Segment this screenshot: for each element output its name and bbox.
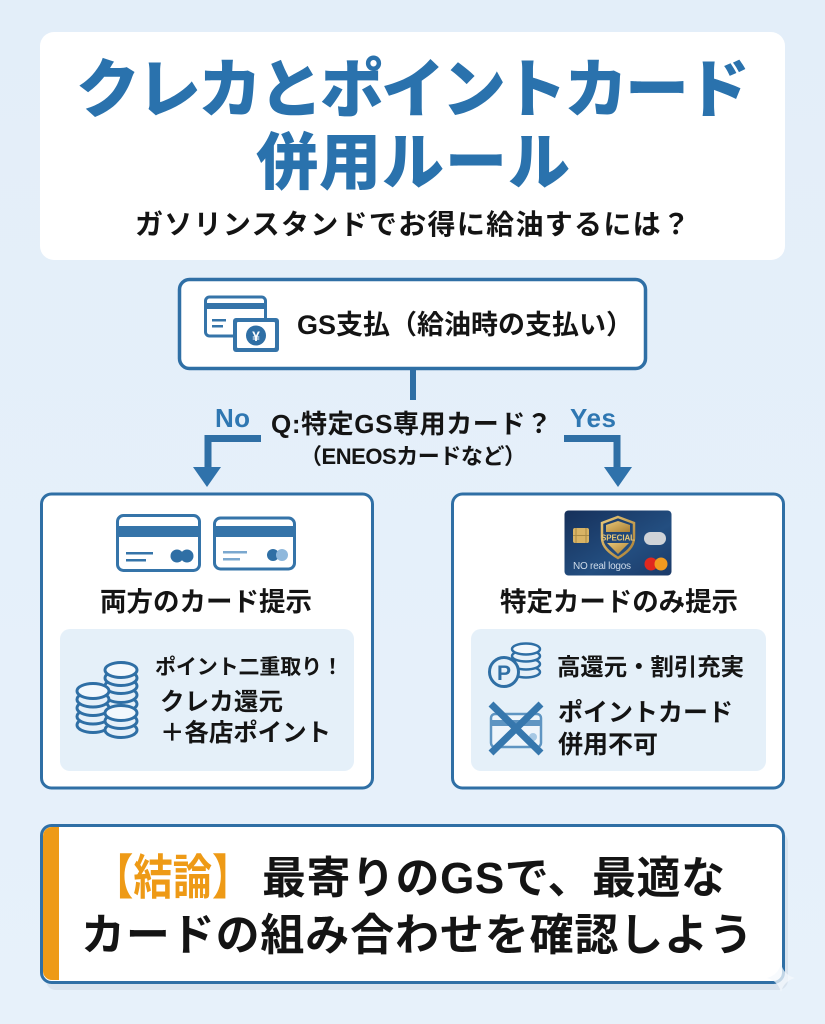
arrow: Yes branch: [564, 403, 632, 487]
question: Q:特定GS専用カード？: [271, 409, 552, 439]
panel: title header: [40, 32, 785, 260]
text: card rebate plus store points: [160, 688, 331, 747]
icon: card and yen banknote: ¥: [252, 328, 260, 344]
text: point card not combinable: 併用不可: [558, 731, 658, 759]
icon: special card: NO real logos: [573, 561, 631, 572]
icon: point coin: [490, 644, 540, 686]
box: specific card merits: [471, 629, 766, 771]
text: high rebate: 高還元・割引充実: [557, 654, 744, 680]
title line 1: クレカとポイントカード: [76, 54, 750, 126]
text: point card not combinable: [558, 699, 733, 759]
arrow: Yes branch: Yes: [570, 403, 616, 433]
icon: crossed-out card: [491, 704, 541, 753]
arrow: No branch: [193, 403, 261, 487]
title line 2: 併用ルール: [256, 129, 570, 198]
heading: specific card only: 特定カードのみ提示: [500, 587, 738, 617]
question: （ENEOSカードなど）: [300, 444, 526, 469]
text: point card not combinable: ポイントカード: [558, 699, 733, 727]
icon: point coin: P: [497, 662, 511, 685]
label: GS payment: GS支払（給油時の支払い）: [297, 310, 633, 340]
panel: GS payment: [180, 280, 646, 368]
question: [271, 409, 552, 469]
icon: sparkle mark: [767, 964, 795, 992]
icon: two credit cards: [118, 516, 294, 570]
box: double points: [60, 629, 354, 771]
arrow: No branch: No: [215, 403, 250, 433]
subtitle: ガソリンスタンドでお得に給油するには？: [135, 209, 690, 240]
arrow: connector from payment box: [410, 369, 416, 400]
text: card rebate plus store points: クレカ還元: [160, 688, 283, 716]
panel: present specific card only: [452, 494, 784, 788]
icon: card and yen banknote: [206, 297, 279, 352]
heading: present both: 両方のカード提示: [100, 587, 312, 617]
icon: special card: SPECIAL: [601, 534, 635, 542]
conclusion line 1: 最寄りのGSで、最適な: [262, 854, 725, 903]
text: double points: ポイント二重取り！: [155, 656, 343, 679]
icon: special card: [564, 510, 672, 576]
panel: conclusion: [42, 826, 788, 990]
panel: present both cards: [42, 494, 372, 788]
conclusion label: 【結論】: [94, 851, 251, 905]
conclusion line 2: カードの組み合わせを確認しよう: [81, 911, 753, 960]
icon: coin stacks: [77, 662, 137, 738]
text: card rebate plus store points: ＋各店ポイント: [160, 719, 331, 747]
